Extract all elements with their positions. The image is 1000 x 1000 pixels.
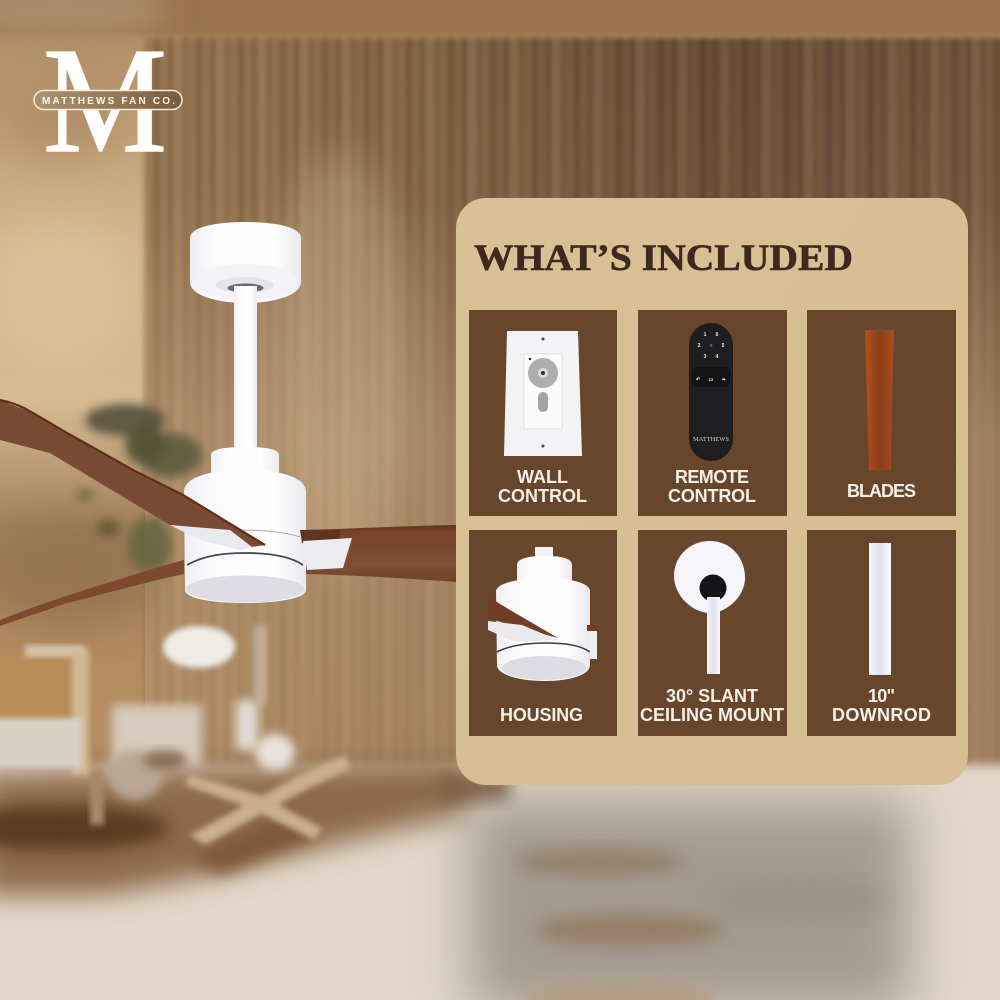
icon: remote: ▭ — [709, 377, 714, 383]
label: REMOTE — [675, 467, 749, 487]
fan blade: lower left — [0, 560, 184, 626]
label: HOUSING — [500, 705, 583, 725]
upper blade edge — [0, 400, 265, 545]
housing groove upper — [240, 530, 300, 537]
label line 2: DOWNROD — [832, 705, 931, 725]
downrod — [234, 286, 257, 448]
icon: remote: 2 — [698, 343, 701, 349]
label: BLADES — [847, 481, 916, 501]
card: remote control — [638, 310, 787, 516]
motor housing — [184, 470, 306, 603]
icon: remote: 5 — [722, 343, 725, 349]
logo name: MATTHEWS FAN CO. — [42, 96, 175, 107]
heading: WHAT’S INCLUDED — [474, 238, 853, 279]
blade tip right — [300, 530, 340, 543]
housing underside — [186, 576, 304, 602]
floor — [0, 760, 1000, 1000]
icon: remote: MATTHEWS — [693, 436, 729, 443]
icon: remote: 3 — [704, 354, 707, 360]
furniture — [0, 625, 350, 845]
card: downrod — [807, 530, 956, 736]
icon: remote: ○ — [709, 343, 713, 349]
icon: remote — [689, 323, 733, 461]
logo name pill — [34, 90, 182, 110]
icon: remote: 1 — [704, 332, 707, 338]
card: blades — [807, 310, 956, 516]
blade bracket right — [303, 538, 352, 570]
housing groove — [187, 553, 303, 565]
panel: what's included — [456, 198, 968, 785]
label line 2: CONTROL — [498, 486, 587, 506]
icon: remote: 4 — [716, 354, 719, 360]
icon: remote: 6 — [716, 332, 719, 338]
label: WALL — [517, 467, 568, 487]
label: 10" — [868, 686, 895, 706]
card: wall control — [469, 310, 617, 516]
label line 2: CEILING MOUNT — [640, 705, 784, 725]
canopy — [190, 222, 301, 303]
icon: downrod — [869, 543, 891, 675]
blade bracket left — [170, 525, 252, 550]
card: ceiling mount — [638, 530, 787, 736]
logo: Matthews Fan Co. — [34, 16, 182, 184]
icon: remote: ↶ — [695, 377, 701, 383]
plant — [75, 404, 202, 573]
icon: housing — [488, 547, 597, 681]
upper left blade — [0, 400, 265, 547]
card: housing — [469, 530, 617, 736]
label: 30° SLANT — [666, 686, 758, 706]
fan blade: right — [298, 525, 456, 582]
motor collar — [211, 447, 279, 478]
label line 2: CONTROL — [668, 486, 756, 506]
icon: remote: ❧ — [722, 377, 726, 383]
icon: slant mount — [674, 541, 745, 674]
panel background — [456, 198, 968, 785]
icon: wall control plate — [504, 331, 582, 456]
logo monogram M: M — [43, 16, 167, 184]
ceiling fan — [0, 222, 456, 626]
icon: blade — [865, 330, 894, 470]
